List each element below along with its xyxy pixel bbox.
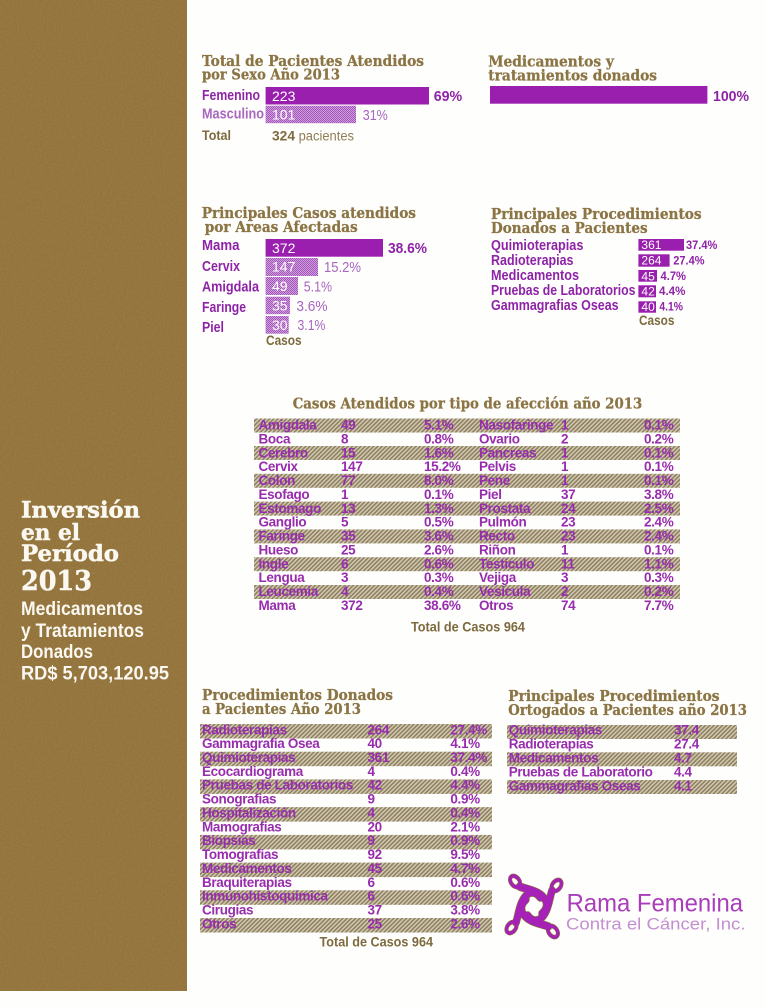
table: casos atendidos por tipo de afeccion: Pancreas	[479, 445, 536, 460]
heading: Medicamentos y	[488, 53, 615, 71]
bar: cervix: 147	[272, 258, 296, 274]
logo wordmark: Rama Femenina	[567, 890, 743, 918]
bar: femenino	[202, 87, 462, 105]
bar: gammagrafias oseas: 40	[641, 300, 655, 314]
bar: quimioterapias: 361	[641, 238, 662, 252]
table: casos atendidos por tipo de afeccion: 37	[561, 487, 575, 502]
bar: 100%	[490, 86, 749, 105]
bar: medicamentos	[491, 268, 686, 284]
table: procedimientos donados	[200, 722, 492, 932]
table: procedimientos donados: 37	[368, 902, 382, 918]
table: casos atendidos por tipo de afeccion: Testiculo	[479, 556, 534, 571]
table: procedimientos donados: 4.7%	[450, 861, 480, 876]
table: casos atendidos por tipo de afeccion: 15.2%	[424, 459, 461, 474]
bar: gammagrafias oseas: Gammagrafias Oseas	[491, 298, 619, 314]
table: casos atendidos por tipo de afeccion: Recto	[479, 528, 515, 544]
table: casos atendidos por tipo de afeccion: 77	[341, 473, 355, 488]
table: casos atendidos por tipo de afeccion: Leucemia	[258, 584, 319, 599]
bar: piel: 3.1%	[298, 318, 325, 334]
sidebar heading	[21, 498, 140, 597]
table: principales procedimientos otorgados: 4.7	[674, 750, 692, 766]
table: casos atendidos por tipo de afeccion: 1.1%	[644, 556, 674, 571]
table: casos atendidos por tipo de afeccion	[254, 418, 680, 613]
table: procedimientos donados: Inmunohistoquimica	[202, 889, 329, 904]
table: casos atendidos por tipo de afeccion: 1	[561, 542, 569, 557]
heading: procedimientos donados: Procedimientos Donados	[202, 686, 393, 704]
bar: femenino: Femenino	[202, 88, 260, 104]
bar: pruebas de laboratorios: 42	[641, 284, 655, 298]
table: casos atendidos por tipo de afeccion: 2.6%	[424, 542, 454, 557]
sidebar investment text: Medicamentos	[21, 599, 143, 620]
table: procedimientos donados: Medicamentos	[202, 861, 292, 876]
bar: medicamentos: 4.7%	[660, 271, 686, 283]
table: casos atendidos por tipo de afeccion: Pulmón	[479, 515, 527, 530]
table: casos atendidos por tipo de afeccion: 147	[341, 459, 362, 474]
table: casos atendidos por tipo de afeccion: Lengua	[258, 570, 305, 585]
heading: Total de Pacientes Atendidos	[202, 52, 424, 70]
bar: amigdala: 49	[272, 278, 288, 294]
table: procedimientos donados: Gammagrafia Osea	[202, 736, 320, 751]
table: casos atendidos por tipo de afeccion: Estomago	[258, 501, 321, 516]
table: casos atendidos por tipo de afeccion: Ganglio	[258, 515, 306, 530]
table: procedimientos donados: 2.6%	[450, 916, 480, 931]
total: 324	[272, 128, 295, 144]
table: casos atendidos por tipo de afeccion: 5	[341, 515, 349, 530]
table: principales procedimientos otorgados: Medicamentos	[509, 750, 598, 766]
table: procedimientos donados: Biopsias	[202, 833, 255, 848]
heading: por Sexo Año 2013	[202, 66, 340, 84]
bar: cervix	[202, 258, 361, 276]
table: casos atendidos por tipo de afeccion: 1	[561, 445, 569, 460]
table: procedimientos donados: 4.4%	[450, 778, 480, 793]
table: procedimientos donados: 264	[368, 722, 390, 737]
table: casos atendidos por tipo de afeccion: 25	[341, 542, 356, 557]
bar: masculino	[202, 106, 388, 124]
table: principales procedimientos otorgados: 4.1	[674, 778, 693, 793]
bar: mama	[202, 238, 427, 257]
sidebar panel	[0, 0, 187, 991]
table: casos atendidos por tipo de afeccion: 0.1%	[644, 418, 674, 432]
table: principales procedimientos otorgados	[507, 723, 737, 794]
table: casos atendidos por tipo de afeccion: 3	[561, 570, 569, 585]
table: casos atendidos por tipo de afeccion: Ingle	[258, 556, 289, 571]
table: procedimientos donados: 45	[368, 861, 383, 876]
heading	[202, 52, 424, 84]
bar: gammagrafias oseas: 4.1%	[659, 302, 683, 314]
table: casos atendidos por tipo de afeccion: 7.7%	[644, 598, 674, 613]
heading: Principales Procedimientos	[491, 205, 702, 223]
table: casos atendidos por tipo de afeccion: Riñon	[479, 542, 516, 557]
table: casos atendidos por tipo de afeccion: 0.2%	[644, 584, 674, 599]
table: casos atendidos por tipo de afeccion: 0.6%	[424, 556, 454, 571]
table: procedimientos donados: Tomografias	[202, 847, 278, 862]
table: casos atendidos por tipo de afeccion: 2.5%	[644, 501, 674, 516]
sidebar heading: 2013	[21, 566, 92, 597]
sidebar investment text: y Tratamientos	[21, 621, 144, 642]
table: casos atendidos por tipo de afeccion: Colon	[258, 473, 295, 488]
bar: masculino: 101	[272, 106, 296, 122]
table: procedimientos donados: 4	[368, 806, 376, 820]
bar: piel: Piel	[202, 320, 224, 336]
table: casos atendidos por tipo de afeccion: 1	[561, 418, 569, 432]
table: casos atendidos por tipo de afeccion: 2.4%	[644, 515, 674, 530]
table: principales procedimientos otorgados: Pruebas de Laboratorio	[509, 764, 653, 780]
table: casos atendidos por tipo de afeccion: 1.3%	[424, 501, 454, 516]
table: procedimientos donados: 0.6%	[450, 889, 480, 904]
bar: piel	[202, 316, 325, 336]
bar: cervix: Cervix	[202, 259, 240, 275]
table: procedimientos donados: 0.4%	[450, 806, 480, 820]
bar: quimioterapias	[491, 238, 717, 254]
bar: radioterapias: Radioterapias	[491, 253, 574, 269]
table: principales procedimientos otorgados: 4.4	[674, 764, 693, 780]
table: casos atendidos por tipo de afeccion: Ovario	[479, 431, 520, 446]
sidebar heading: en el	[21, 520, 80, 546]
table: casos atendidos por tipo de afeccion: 2	[561, 584, 568, 599]
bar: amigdala	[202, 277, 332, 296]
table: procedimientos donados: 6	[368, 889, 376, 904]
table: casos atendidos por tipo de afeccion: Amigdala	[258, 418, 317, 432]
table: procedimientos donados: 20	[368, 819, 382, 834]
table: procedimientos donados: Braquiterapias	[202, 875, 292, 890]
table: principales procedimientos otorgados: 27.4	[674, 737, 700, 752]
table: casos atendidos por tipo de afeccion: 0.4%	[424, 584, 454, 599]
table: procedimientos donados: 9	[368, 833, 375, 848]
bar: radioterapias: 27.4%	[673, 256, 704, 268]
total: pacientes	[299, 129, 354, 144]
table: casos atendidos por tipo de afeccion: 1	[341, 487, 349, 502]
table: procedimientos donados: Sonografias	[202, 792, 276, 807]
heading	[202, 204, 416, 236]
table: casos atendidos por tipo de afeccion: 0.8%	[424, 431, 454, 446]
table: procedimientos donados: 92	[368, 847, 382, 862]
logo tagline: Contra el Cáncer, Inc.	[566, 914, 746, 933]
table: procedimientos donados: 4	[368, 764, 376, 779]
bar: pruebas de laboratorios: Pruebas de Laboratorios	[491, 283, 636, 299]
table: procedimientos donados: 25	[368, 916, 383, 931]
table: casos atendidos por tipo de afeccion: Pene	[479, 473, 511, 488]
table: casos atendidos por tipo de afeccion: 38.6%	[424, 598, 461, 613]
sidebar investment text: Donados	[21, 642, 93, 663]
table: principales procedimientos otorgados: 37.4	[674, 723, 700, 738]
table: casos atendidos por tipo de afeccion: 74	[561, 598, 576, 613]
table title: casos atendidos: Casos Atendidos por tipo de afección año 2013	[293, 394, 642, 412]
heading: principales procedimientos otorgados: Principales Procedimientos	[508, 687, 720, 705]
table: casos atendidos por tipo de afeccion: 1	[561, 459, 569, 474]
bar: faringe	[202, 297, 328, 316]
table: casos atendidos por tipo de afeccion: 24	[561, 501, 576, 516]
table: procedimientos donados: 0.9%	[450, 792, 480, 807]
table: casos atendidos por tipo de afeccion: 3.8%	[644, 487, 674, 502]
table: principales procedimientos otorgados: Gammagrafias Oseas	[509, 778, 640, 793]
table: casos atendidos por tipo de afeccion: 23	[561, 515, 576, 530]
panel: casos por areas afectadas	[202, 204, 427, 348]
table: procedimientos donados: 9	[368, 792, 375, 807]
table: casos atendidos por tipo de afeccion: 3	[341, 570, 349, 585]
table: casos atendidos por tipo de afeccion: 4	[341, 584, 349, 599]
logo: rama femenina	[504, 874, 746, 939]
table: procedimientos donados: Mamografias	[202, 819, 281, 834]
table: procedimientos donados: Pruebas de Laboratorios	[202, 778, 353, 793]
table total: casos: Total de Casos 964	[411, 619, 525, 635]
table: procedimientos donados: 37.4%	[450, 750, 487, 765]
bar: medicamentos: Medicamentos	[491, 268, 579, 284]
table: procedimientos donados: Ecocardiograma	[202, 764, 304, 779]
table: casos atendidos por tipo de afeccion: 23	[561, 528, 576, 544]
table: casos atendidos por tipo de afeccion: 0.5%	[424, 515, 454, 530]
table: casos atendidos por tipo de afeccion: 372	[341, 598, 362, 613]
table: casos atendidos por tipo de afeccion: Esofago	[258, 487, 309, 502]
heading	[491, 205, 702, 237]
bar: 100%: 100%	[713, 89, 749, 105]
table: procedimientos donados: 40	[368, 736, 382, 751]
table: casos atendidos por tipo de afeccion: 49	[341, 418, 355, 432]
bar: radioterapias	[491, 253, 704, 269]
heading: por Areas Afectadas	[205, 218, 358, 236]
axis label: Casos	[266, 332, 302, 348]
table: casos atendidos por tipo de afeccion: 35	[341, 528, 356, 544]
bar: medicamentos: 45	[641, 269, 655, 283]
table: casos atendidos por tipo de afeccion: 8	[341, 431, 349, 446]
sidebar investment text	[21, 599, 169, 684]
table: casos atendidos por tipo de afeccion: Prostata	[479, 501, 531, 516]
table: casos atendidos por tipo de afeccion: Boca	[258, 431, 291, 446]
table: casos atendidos por tipo de afeccion: 3.6%	[424, 528, 454, 544]
bar: amigdala: 5.1%	[304, 280, 332, 296]
table: casos atendidos por tipo de afeccion: Otros	[479, 598, 513, 613]
table: procedimientos donados: 9.5%	[450, 847, 480, 862]
sidebar heading: Período	[21, 541, 119, 567]
bar: faringe: Faringe	[202, 300, 246, 316]
heading: Donados a Pacientes	[491, 219, 648, 237]
table: casos atendidos por tipo de afeccion: 2.4%	[644, 528, 674, 544]
table: casos atendidos por tipo de afeccion: Hueso	[258, 542, 298, 557]
table: casos atendidos por tipo de afeccion: 6	[341, 556, 349, 571]
heading: Principales Casos atendidos	[202, 204, 416, 222]
table: casos atendidos por tipo de afeccion: 5.1%	[424, 418, 454, 432]
bar: faringe: 3.6%	[296, 299, 328, 315]
table: principales procedimientos otorgados: Radioterapias	[509, 737, 593, 752]
total	[202, 127, 354, 144]
table: procedimientos donados: 6	[368, 875, 376, 890]
bar: masculino: 31%	[363, 108, 388, 124]
table: casos atendidos por tipo de afeccion: 11	[561, 556, 575, 571]
table: casos atendidos por tipo de afeccion: 0.3%	[644, 570, 674, 585]
table: casos atendidos por tipo de afeccion: 8.0%	[424, 473, 454, 488]
heading: principales procedimientos otorgados	[508, 687, 747, 719]
table: casos atendidos por tipo de afeccion: 0.1%	[644, 473, 674, 488]
table: procedimientos donados: 0.9%	[450, 833, 480, 848]
table: casos atendidos por tipo de afeccion: 0.1%	[644, 445, 674, 460]
bar: mama: 38.6%	[388, 241, 427, 257]
table: casos atendidos por tipo de afeccion: Pelvis	[479, 459, 516, 474]
bar: piel: 30	[272, 317, 288, 333]
table: casos atendidos por tipo de afeccion: 2	[561, 431, 568, 446]
table: casos atendidos por tipo de afeccion: Vejiga	[479, 570, 517, 585]
panel: pacientes por sexo	[202, 52, 462, 144]
table: casos atendidos por tipo de afeccion: 1.6%	[424, 445, 454, 460]
table: casos atendidos por tipo de afeccion: 0.1%	[644, 542, 674, 557]
bar: mama: Mama	[202, 238, 240, 254]
table: casos atendidos por tipo de afeccion: Faringe	[258, 528, 306, 544]
heading: procedimientos donados	[202, 686, 393, 718]
bar: mama: 372	[272, 240, 296, 256]
table: casos atendidos por tipo de afeccion: 15	[341, 445, 356, 460]
table: procedimientos donados: Hospitalización	[202, 806, 296, 820]
table: procedimientos donados: Quimioterapias	[202, 750, 295, 765]
panel: medicamentos y tratamientos donados	[488, 53, 749, 105]
table: procedimientos donados: 361	[368, 750, 390, 765]
bar: quimioterapias: 37.4%	[686, 240, 717, 252]
bar: femenino: 223	[272, 88, 296, 104]
bar: radioterapias: 264	[641, 254, 662, 268]
table: casos atendidos por tipo de afeccion: Piel	[479, 487, 502, 502]
bar: cervix: 15.2%	[324, 260, 361, 276]
heading: tratamientos donados	[488, 67, 657, 85]
icon: ribbon emblem	[504, 874, 564, 939]
table total: procedimientos: Total de Casos 964	[320, 934, 433, 950]
table: procedimientos donados: 42	[368, 778, 382, 793]
table: procedimientos donados: 2.1%	[450, 819, 480, 834]
table: casos atendidos por tipo de afeccion: 0.2%	[644, 431, 674, 446]
table: casos atendidos por tipo de afeccion: 13	[341, 501, 356, 516]
table: casos atendidos por tipo de afeccion: Mama	[258, 598, 296, 613]
total: Total	[202, 127, 231, 143]
table: casos atendidos por tipo de afeccion: Nasofaringe	[479, 418, 554, 432]
table: casos atendidos por tipo de afeccion: 0.1%	[644, 459, 674, 474]
bar: amigdala: Amigdala	[202, 280, 260, 296]
table: casos atendidos por tipo de afeccion: 0.3%	[424, 570, 454, 585]
table: procedimientos donados: 27.4%	[450, 722, 487, 737]
bar: masculino: Masculino	[202, 107, 264, 123]
bar: faringe: 35	[272, 298, 288, 314]
table: procedimientos donados: 0.6%	[450, 875, 480, 890]
heading	[488, 53, 657, 85]
table: casos atendidos por tipo de afeccion: Cerebro	[258, 445, 308, 460]
table: procedimientos donados: Cirugias	[202, 902, 253, 918]
bar: femenino: 69%	[434, 89, 462, 105]
sidebar heading: Inversión	[21, 498, 140, 524]
bar: quimioterapias: Quimioterapias	[491, 238, 583, 254]
bar: pruebas de laboratorios: 4.4%	[659, 286, 685, 298]
table: casos atendidos por tipo de afeccion: Cervix	[258, 459, 299, 474]
table: casos atendidos por tipo de afeccion: 0.1%	[424, 487, 454, 502]
table: principales procedimientos otorgados: Quimioterapias	[509, 723, 602, 738]
table: casos atendidos por tipo de afeccion: 1	[561, 473, 569, 488]
table: casos atendidos por tipo de afeccion: Vesicula	[479, 584, 531, 599]
table: procedimientos donados: 4.1%	[450, 736, 480, 751]
panel: principales procedimientos donados	[491, 205, 717, 328]
table: procedimientos donados: 0.4%	[450, 764, 480, 779]
table: procedimientos donados: 3.8%	[450, 902, 480, 918]
table: procedimientos donados: Otros	[202, 916, 236, 931]
heading: procedimientos donados: a Pacientes Año 2013	[202, 700, 361, 718]
axis label: Casos	[639, 312, 675, 328]
table: procedimientos donados: Radioterapias	[202, 722, 287, 737]
sidebar investment text: RD$ 5,703,120.95	[21, 664, 169, 684]
